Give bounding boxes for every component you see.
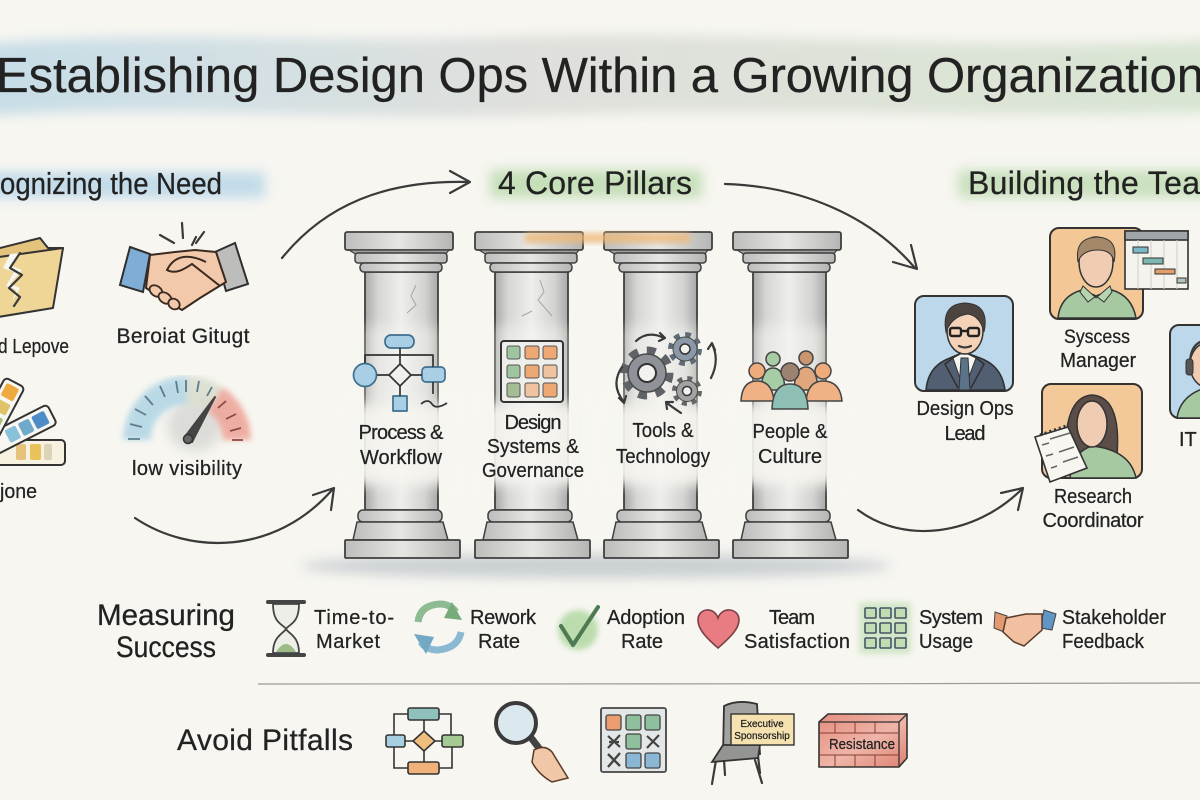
pillar: process and workflow: Process & (358, 422, 444, 444)
title: Establishing Design Ops Within a Growing Organization (0, 49, 1200, 103)
metric: system usage: System (919, 607, 983, 629)
pillar: people and culture (733, 232, 848, 558)
pillar: design systems and governance (475, 232, 590, 558)
pitfall icon: resistance brick wall: Resistance (829, 736, 895, 753)
arrow: need to pillars (282, 171, 470, 258)
icon: people group (741, 351, 842, 409)
pillar: process and workflow: Workflow (360, 447, 443, 469)
icon: colour swatches (0, 377, 65, 465)
pillar: process and workflow (345, 232, 460, 558)
metric: adoption rate: Adoption (607, 607, 685, 629)
icon: gantt chart (1125, 231, 1188, 289)
team card: research coordinator: Coordinator (1042, 510, 1144, 532)
label: beroiat gitugt: Beroiat Gitugt (116, 325, 250, 348)
pillar: tools and technology (604, 232, 719, 558)
heading: building the team: Building the Tea (968, 165, 1200, 201)
divider (258, 683, 1200, 684)
metric: team satisfaction: Team (769, 607, 815, 629)
pitfall icon: magnifying glass (496, 703, 568, 782)
metric: team satisfaction (698, 607, 850, 653)
metric: time to market (268, 602, 394, 655)
metric: time to market: Time-to- (314, 607, 394, 629)
metric: stakeholder feedback (994, 607, 1166, 653)
section: measuring success: Measuring (97, 599, 235, 632)
arrow: pillars to team (725, 184, 917, 269)
heading: recognizing the need: ognizing the Need (0, 166, 222, 201)
pitfall icon: resistance brick wall (819, 714, 907, 767)
pitfall icon: disordered grid (601, 708, 666, 772)
team card: success manager: Manager (1060, 350, 1136, 372)
metric: adoption rate (558, 607, 685, 653)
icon: broken folder (0, 238, 63, 318)
metric: adoption rate: Rate (621, 631, 663, 653)
pitfall icon: tangled flowchart (386, 708, 463, 774)
pillar: tools and technology: Tools & (632, 420, 694, 442)
icon: flowchart (354, 335, 447, 411)
arrow: pillars to team lower (858, 488, 1023, 531)
metric: time to market: Market (316, 631, 380, 653)
label: low visibility: low visibility (132, 458, 242, 480)
section: measuring success (97, 599, 235, 664)
label: jone: jone (0, 481, 37, 503)
metric: rework rate (414, 602, 537, 654)
section: avoid pitfalls: Avoid Pitfalls (177, 724, 353, 757)
pitfall icon: empty chair with executive sponsorship sign: Executive (740, 719, 784, 730)
pillar: people and culture: People & (752, 421, 828, 443)
team card: design ops lead (915, 296, 1014, 445)
metric: system usage (859, 602, 983, 654)
pillar: design systems and governance: Systems & (487, 436, 580, 458)
metric: team satisfaction: Satisfaction (744, 631, 850, 653)
heading: 4 core pillars: 4 Core Pillars (498, 165, 692, 201)
pillar: people and culture: Culture (758, 446, 822, 468)
team card: success manager: Syscess (1064, 327, 1130, 348)
team card: IT: IT (1179, 429, 1197, 451)
metric: rework rate: Rework (470, 607, 537, 629)
team card: design ops lead: Design Ops (916, 398, 1014, 420)
pitfall icon: empty chair with executive sponsorship sign (712, 702, 794, 784)
metric: stakeholder feedback: Stakeholder (1062, 607, 1166, 629)
title (0, 35, 1200, 117)
pillar: tools and technology: Technology (616, 446, 710, 468)
pillar: design systems and governance: Design (504, 412, 562, 434)
team card: research coordinator: Research (1054, 486, 1132, 508)
glow between pillar capitals (525, 233, 690, 243)
section: measuring success: Success (116, 631, 216, 664)
icon: gears (616, 333, 716, 413)
pitfall icon: empty chair with executive sponsorship sign: Sponsorship (734, 731, 790, 742)
arrow: need lower curve to pillars (135, 488, 334, 543)
team card: IT (1170, 325, 1200, 451)
team card: success manager (1050, 228, 1188, 372)
label: lepove: d Lepove (0, 336, 69, 358)
pillar: design systems and governance: Governance (482, 460, 584, 482)
icon: notepad (1035, 426, 1087, 482)
icon: design system grid (501, 341, 563, 402)
pillars shadow (301, 554, 891, 578)
team card: research coordinator (1035, 384, 1144, 532)
icon: handshake with tension marks (120, 223, 248, 312)
icon: low visibility gauge (128, 380, 243, 451)
metric: stakeholder feedback: Feedback (1062, 631, 1145, 653)
team card: design ops lead: Lead (944, 423, 986, 445)
metric: rework rate: Rate (478, 631, 520, 653)
metric: system usage: Usage (919, 631, 973, 653)
